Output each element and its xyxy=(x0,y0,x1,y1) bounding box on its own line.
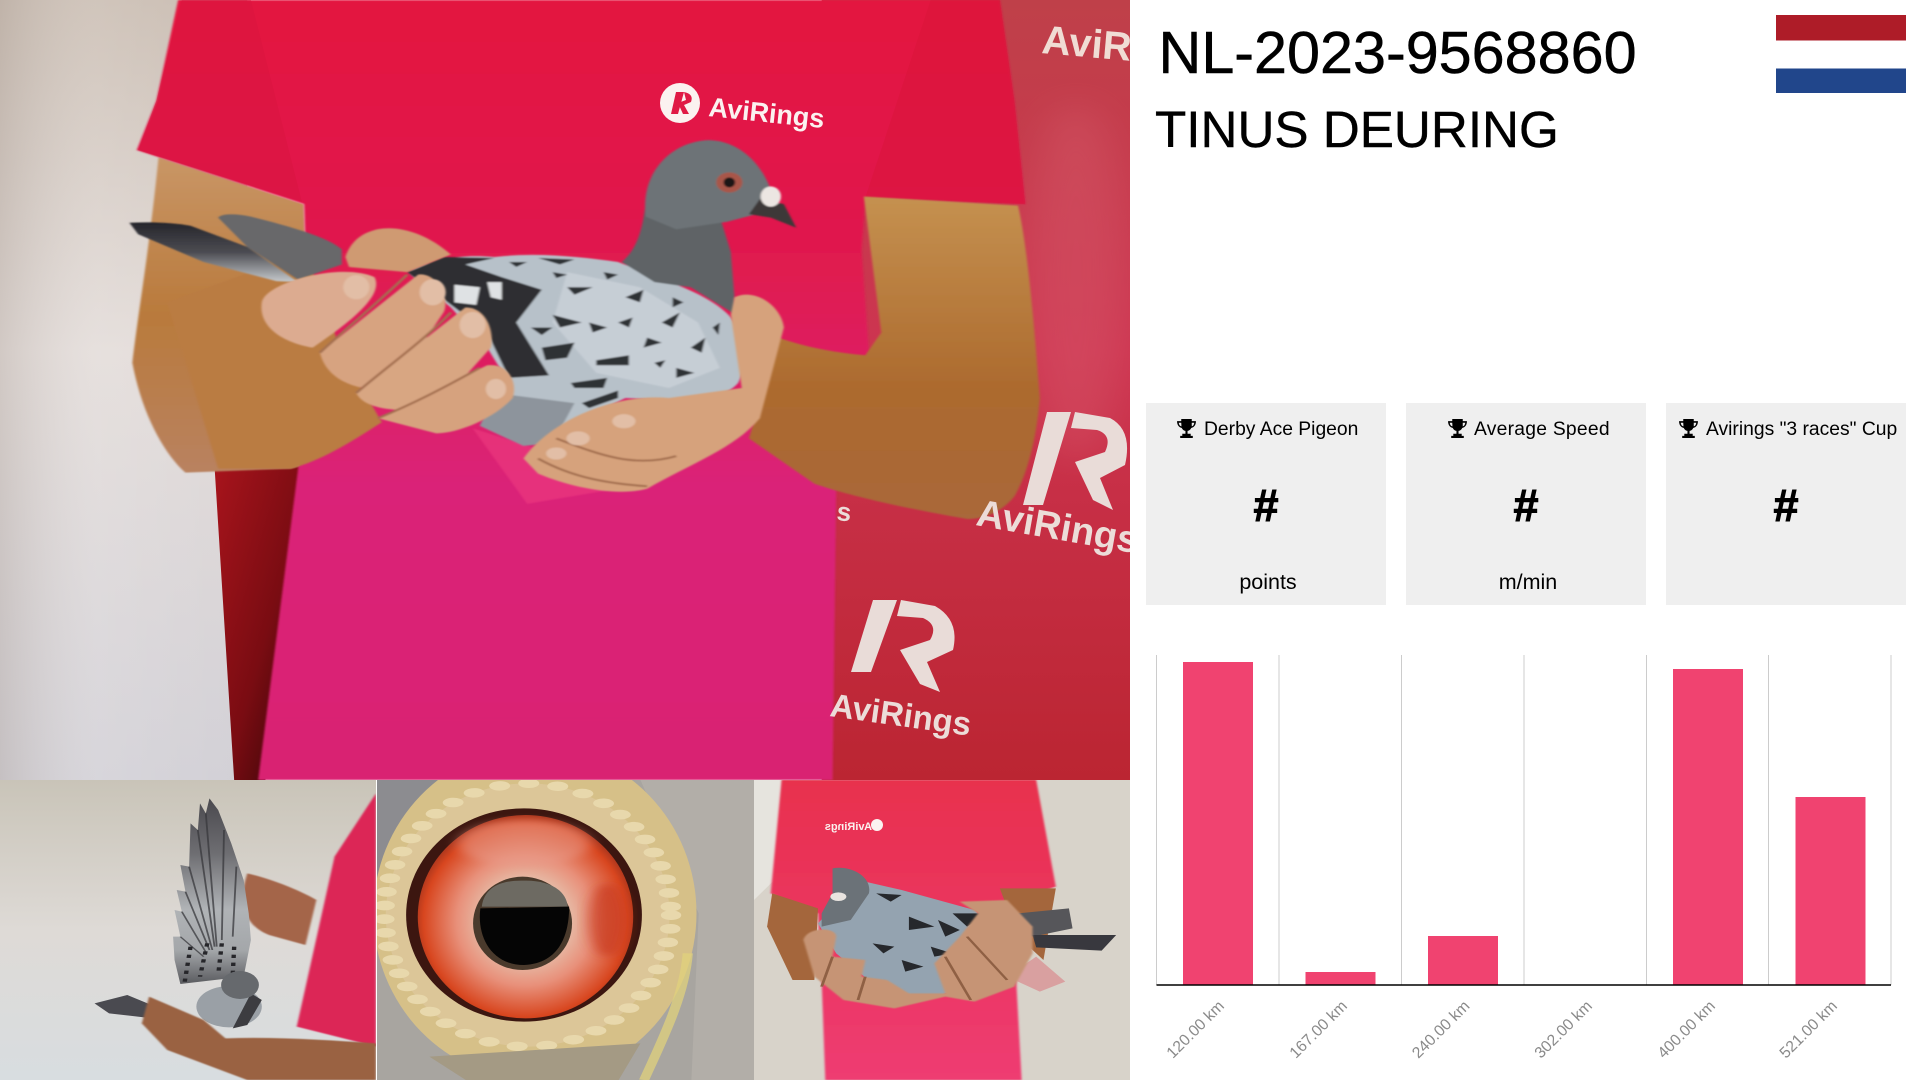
axis labels: 240.00 km xyxy=(1409,998,1473,1062)
logo text: shirt: AviRings xyxy=(707,92,826,134)
icon: trophy xyxy=(1448,419,1467,438)
logo text: backdrop fragment: s xyxy=(835,496,853,527)
card value: # xyxy=(1253,480,1279,531)
axis labels: 521.00 km xyxy=(1777,998,1841,1062)
right detail photo: pigeon held in hands xyxy=(754,780,1130,1080)
bar: 521 km xyxy=(1796,797,1866,985)
axis labels: 302.00 km xyxy=(1532,998,1596,1062)
axis labels: 400.00 km xyxy=(1655,998,1719,1062)
photo collage xyxy=(0,0,1130,1080)
logo mark: backdrop lower xyxy=(851,600,955,692)
axis labels xyxy=(1164,998,1841,1062)
pigeon ring number title: NL-2023-9568860 xyxy=(1158,19,1637,86)
card: Average Speed xyxy=(1406,403,1646,605)
card value: # xyxy=(1773,480,1799,531)
icon: trophy xyxy=(1177,419,1196,438)
icon: trophy xyxy=(1679,419,1698,438)
icon: Netherlands flag xyxy=(1776,15,1906,93)
logo mark: backdrop middle xyxy=(1023,412,1127,510)
card unit: m/min xyxy=(1499,570,1557,594)
pigeon xyxy=(129,140,796,446)
axis labels: 167.00 km xyxy=(1287,998,1351,1062)
hands xyxy=(261,228,784,492)
bar: 240 km xyxy=(1428,936,1498,985)
logo text: mirrored on small photo shirt: AviRings xyxy=(825,821,872,833)
bar: 400 km xyxy=(1673,669,1743,985)
card unit: points xyxy=(1239,570,1297,594)
axis labels: 120.00 km xyxy=(1164,998,1228,1062)
bar: 120 km xyxy=(1183,662,1253,985)
card value: # xyxy=(1513,480,1539,531)
card: Avirings 3 races Cup xyxy=(1666,403,1906,605)
left detail photo: spread wing xyxy=(0,780,376,1080)
logo text: backdrop lower: AviRings xyxy=(828,686,974,743)
card label: Avirings "3 races" Cup xyxy=(1706,419,1897,440)
logos printed on shirt and backdrop xyxy=(660,18,1130,833)
logo: circle on shirt xyxy=(660,83,700,123)
card label: Derby Ace Pigeon xyxy=(1204,419,1358,440)
card: Derby Ace Pigeon xyxy=(1146,403,1386,605)
main photo: handler holding pigeon xyxy=(0,0,1130,780)
owner name: TINUS DEURING xyxy=(1155,101,1559,158)
card label: Average Speed xyxy=(1474,419,1610,440)
bar chart: results by distance xyxy=(1156,655,1892,1062)
logo: mirrored circle xyxy=(871,819,883,831)
middle detail photo: pigeon eye xyxy=(377,780,754,1080)
bar: 167 km xyxy=(1306,972,1376,985)
